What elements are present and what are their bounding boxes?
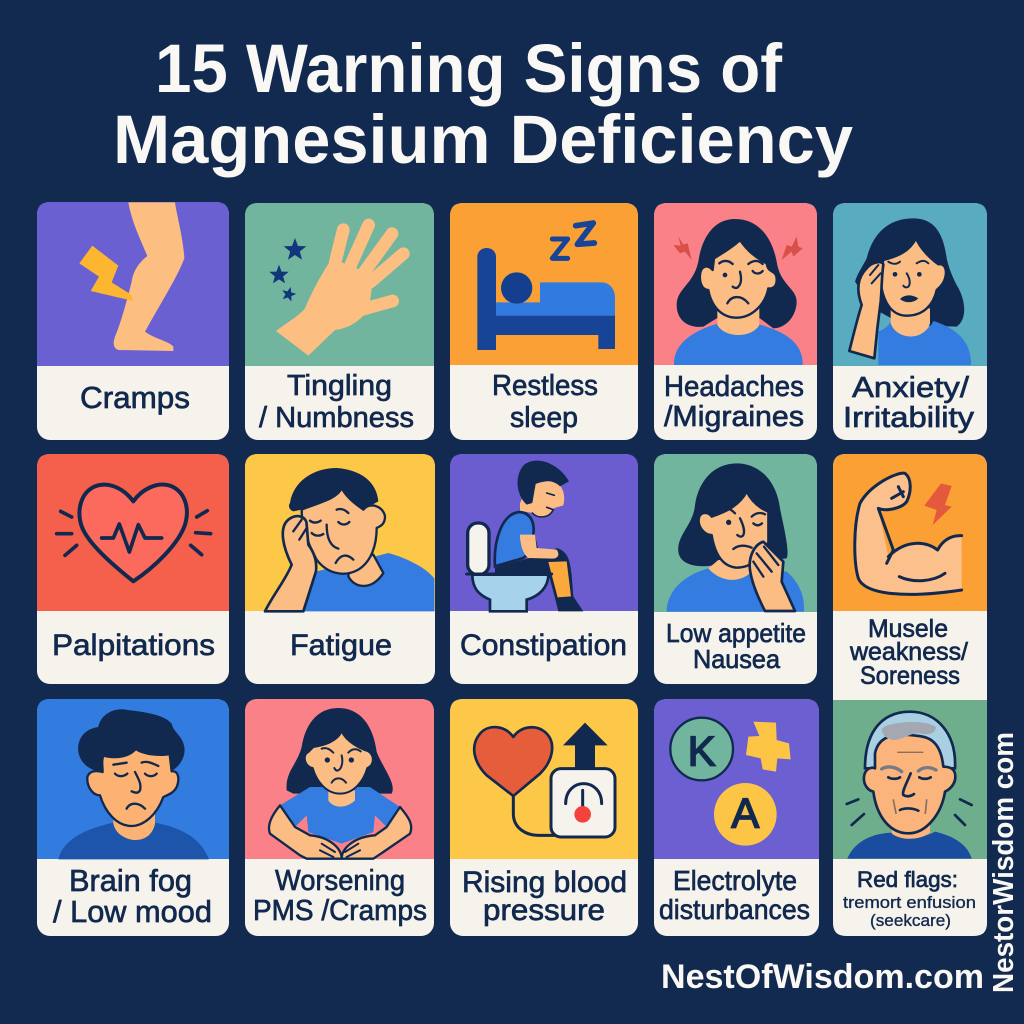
icon: tired man resting head on hand (265, 468, 434, 611)
panel: restless sleep (450, 203, 638, 440)
label (259, 370, 414, 434)
panel: headaches (654, 203, 817, 440)
icon: bed with sleeper and zz (477, 223, 615, 350)
label (666, 618, 806, 674)
panel: worsening PMS (245, 699, 434, 936)
label: Tingling (287, 370, 392, 402)
label: Musele (868, 615, 948, 643)
label: Rising blood (462, 866, 627, 899)
label: Headaches (664, 371, 804, 403)
label: Soreness (860, 662, 960, 690)
icon: woman holding abdomen (269, 708, 411, 859)
icon: flexed arm with bolt (855, 473, 962, 594)
label: pressure (483, 894, 605, 927)
icon: K and A element circles with puzzle shape: A (731, 789, 759, 836)
label: PMS /Cramps (253, 895, 427, 927)
label: (seekcare) (870, 911, 951, 930)
label (664, 371, 804, 433)
label (492, 370, 598, 434)
label: Cramps (80, 380, 190, 415)
label: Electrolyte (673, 865, 797, 896)
panel: rising blood pressure (450, 699, 638, 936)
label: Worsening (275, 865, 405, 897)
panel: electrolyte disturbances (654, 699, 819, 936)
label: Irritability (843, 402, 975, 434)
label: disturbances (659, 894, 810, 925)
label: Fatigue (290, 629, 392, 662)
icon: woman with headache (673, 219, 803, 365)
icon: sad curly-haired person (58, 709, 209, 859)
label: sleep (510, 402, 578, 434)
label: Nausea (693, 644, 781, 674)
label: tremort enfusion (843, 893, 976, 912)
title: 15 Warning Signs of (155, 30, 783, 107)
panel: cramps (37, 202, 229, 440)
label: /Migraines (664, 401, 804, 433)
label: Constipation (460, 629, 627, 662)
icon: heart, gauge and up arrow (474, 723, 615, 837)
label: Red flags: (857, 867, 958, 892)
icon: nauseous woman with hand on chin (667, 463, 804, 612)
icon: hand with stars (269, 225, 403, 356)
icon: older man with tremor marks (847, 712, 972, 859)
label (659, 865, 810, 925)
website footer: NestOfWisdom.com (661, 958, 984, 996)
icon: heart with pulse line (57, 485, 211, 581)
label (843, 867, 976, 930)
label (843, 372, 975, 434)
label (462, 866, 627, 927)
label: Low appetite (666, 618, 806, 648)
panel: fatigue (245, 454, 435, 684)
icon: K and A element circles with puzzle shape (670, 718, 791, 846)
panel: palpitations (37, 454, 229, 684)
title (113, 30, 853, 178)
label (253, 865, 427, 927)
icon: person on toilet (467, 461, 583, 611)
panel: low appetite (654, 454, 817, 684)
label: Anxiety/ (852, 372, 970, 404)
panel: muscle weakness (833, 454, 987, 700)
label (849, 615, 968, 690)
panel: anxiety (833, 203, 987, 440)
label: / Numbness (259, 402, 414, 434)
icon: K and A element circles with puzzle shape: K (688, 727, 716, 774)
label: weakness/ (849, 638, 968, 666)
panel: tingling (245, 203, 434, 440)
icon: leg with lightning bolt (79, 202, 184, 351)
label: Restless (492, 370, 598, 402)
label: / Low mood (53, 894, 212, 929)
label: Brain fog (69, 863, 192, 898)
label (53, 863, 212, 929)
panel: constipation (450, 454, 638, 684)
label: Palpitations (52, 629, 215, 662)
title: Magnesium Deficiency (113, 101, 853, 178)
panel: red flags (833, 700, 987, 936)
panel: brain fog (37, 699, 229, 936)
vertical website text: NestorWisdom com (988, 732, 1020, 993)
icon: anxious woman holding head (849, 218, 971, 365)
